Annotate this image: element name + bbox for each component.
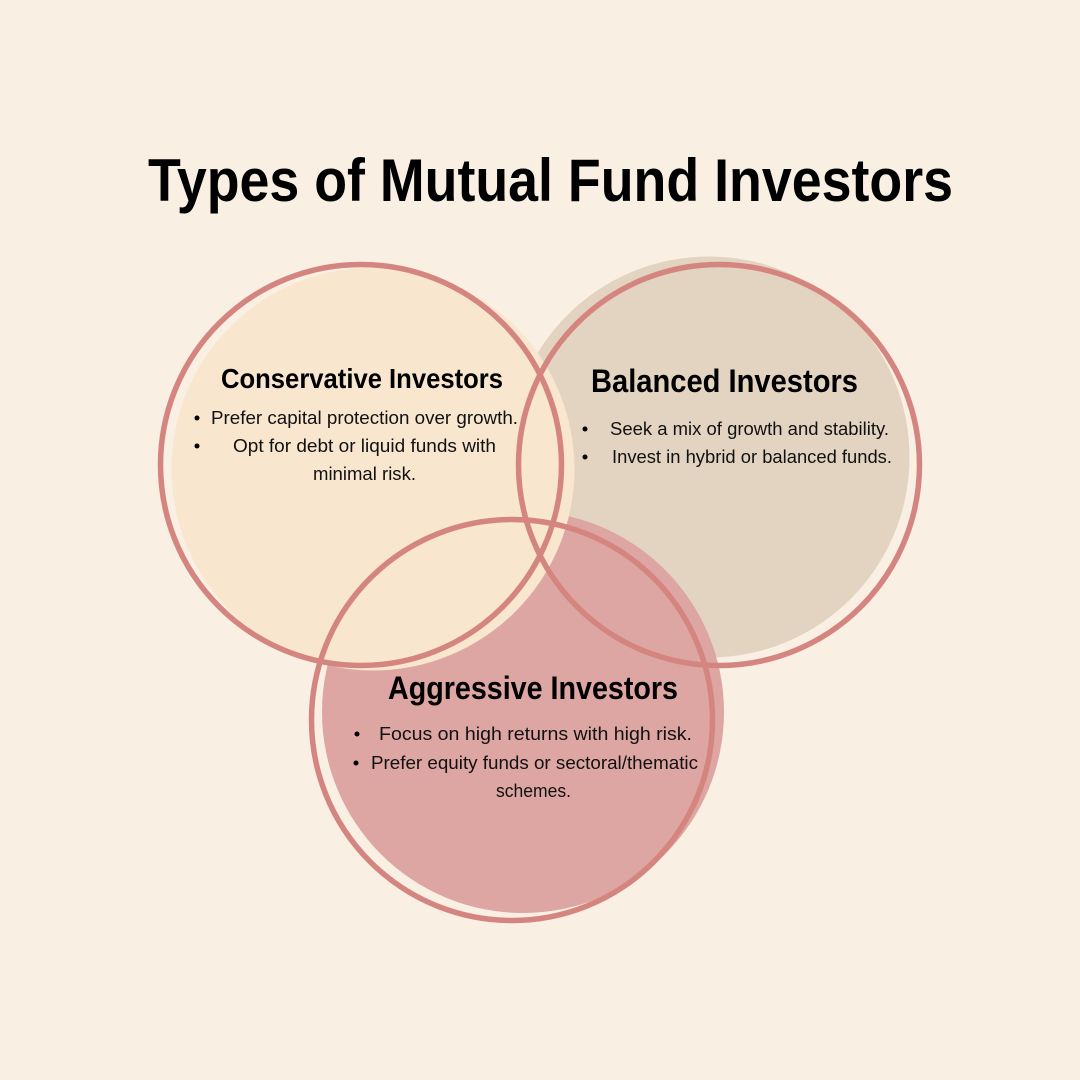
circle fill: balanced [508, 256, 910, 658]
text block: conservative points: Opt for debt or liquid funds with [233, 435, 496, 456]
ring: aggressive [312, 520, 712, 920]
panel: conservative investors [194, 363, 518, 484]
ring: conservative [160, 264, 562, 666]
heading: balanced: Balanced Investors [591, 363, 858, 399]
text block: balanced points: Invest in hybrid or balanced funds. [612, 446, 892, 467]
text block: balanced points: Seek a mix of growth and stability. [610, 418, 889, 439]
panel: balanced investors [582, 363, 892, 467]
text block: conservative points [194, 407, 518, 484]
heading: aggressive: Aggressive Investors [388, 670, 678, 706]
text block: aggressive points [354, 723, 698, 801]
text block: conservative points: minimal risk. [313, 463, 416, 484]
text block: balanced points [582, 418, 892, 467]
text block: conservative points: Prefer capital protection over growth. [211, 407, 518, 428]
circle fill: conservative [172, 268, 574, 670]
text block: aggressive points: Prefer equity funds or sectoral/thematic [371, 752, 698, 773]
title: Types of Mutual Fund Investors [148, 147, 953, 214]
text block: aggressive points: Focus on high returns with high risk. [379, 723, 692, 744]
ring: balanced [518, 264, 920, 666]
heading: conservative: Conservative Investors [221, 363, 503, 394]
text block: aggressive points: schemes. [496, 780, 571, 801]
panel: aggressive investors [354, 670, 698, 801]
circle fill: aggressive [322, 511, 724, 913]
